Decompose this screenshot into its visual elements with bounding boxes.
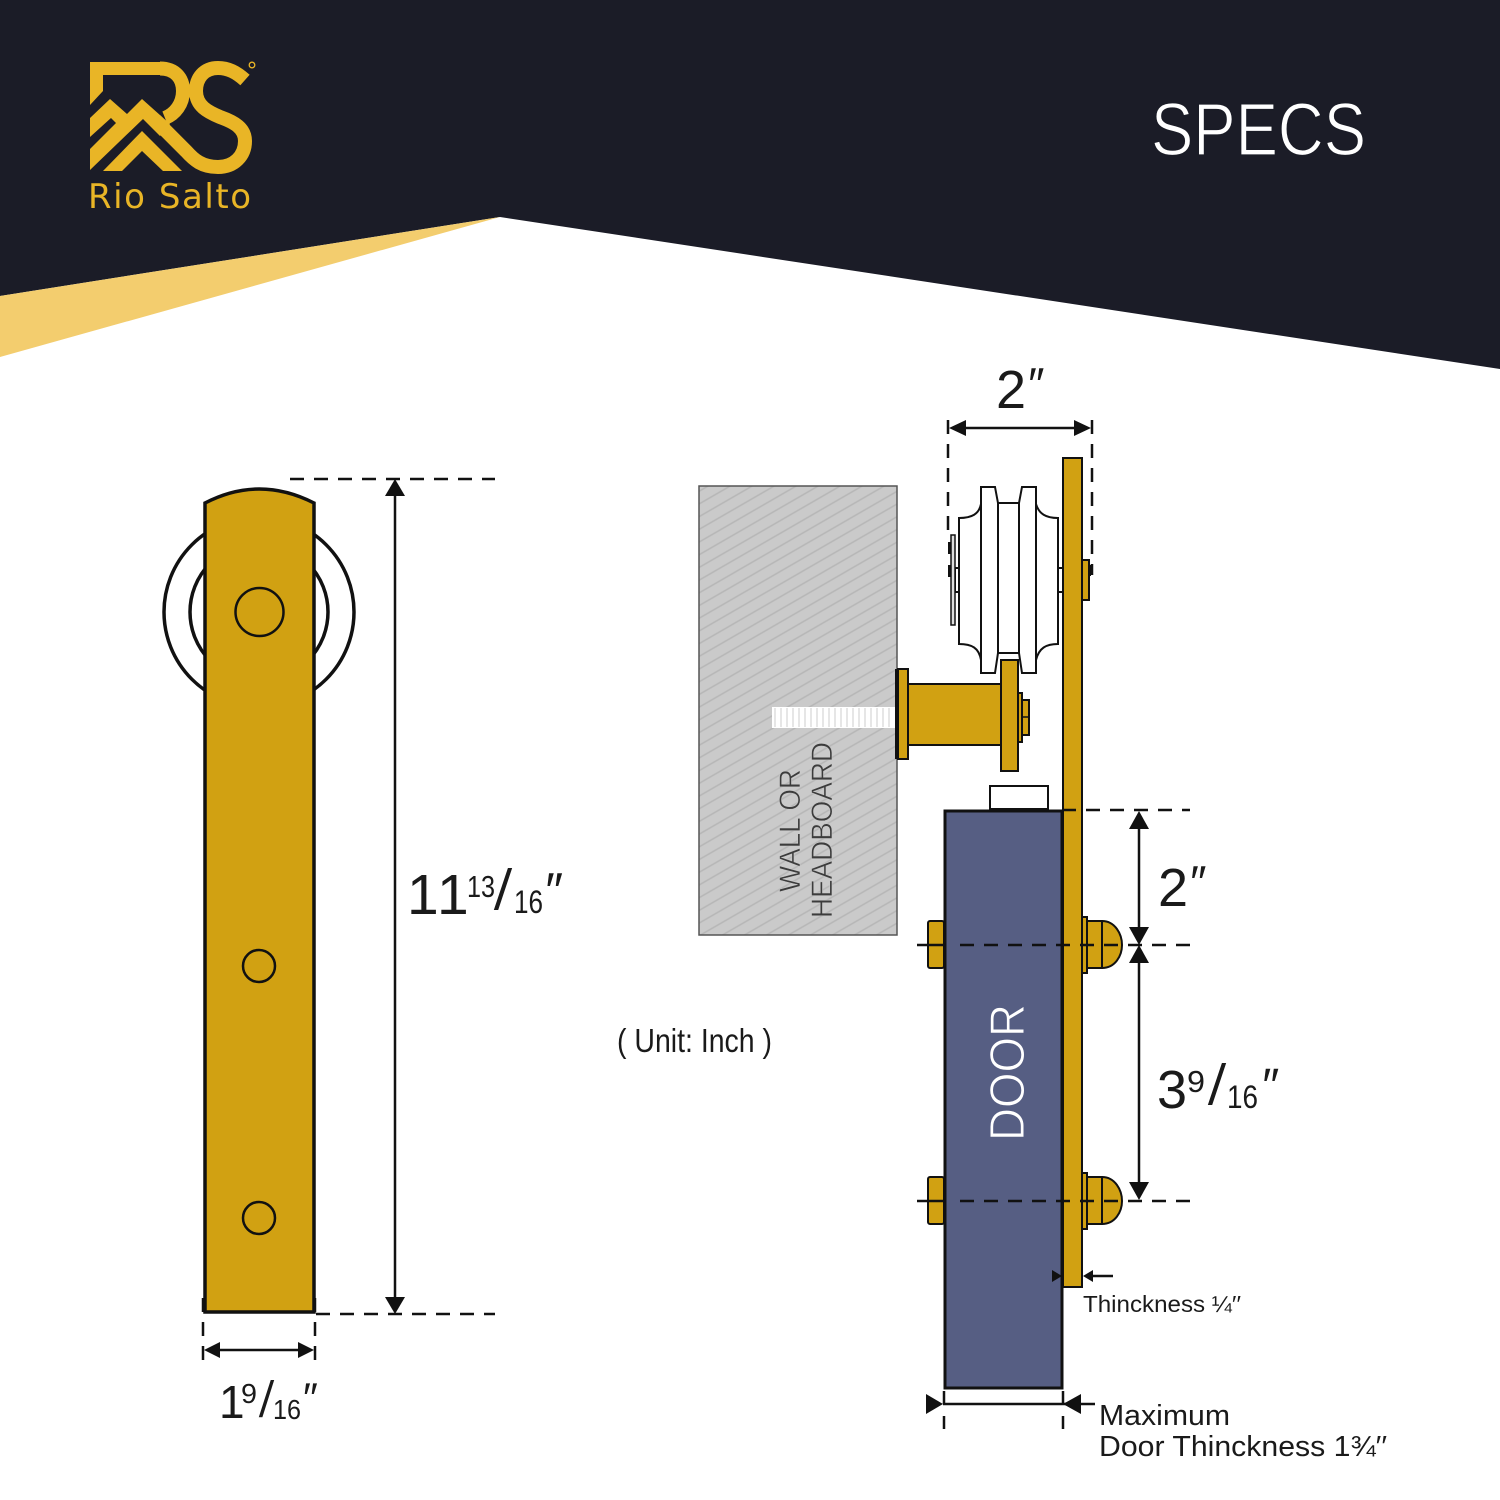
- width dimension: [203, 1298, 315, 1360]
- upper door bolt: [928, 917, 1122, 973]
- wall block: [699, 486, 897, 935]
- wall label: WALL OR: [774, 769, 807, 892]
- logo mountain inner chevron: [103, 131, 182, 171]
- lower door bolt: [928, 1173, 1122, 1229]
- height label: [407, 858, 563, 927]
- two inch label: 2: [1158, 858, 1188, 918]
- three and nine sixteenths label: [1157, 1053, 1279, 1120]
- two inch label: ″: [1188, 856, 1206, 908]
- width label: ″: [301, 1374, 318, 1421]
- standoff spacer: [895, 660, 1029, 771]
- header dark band: [0, 0, 1500, 369]
- width label: [219, 1371, 318, 1429]
- door thickness label: Door Thinckness 1¾′′: [1099, 1431, 1387, 1463]
- height label: ″: [543, 863, 563, 919]
- three and nine sixteenths label: 3: [1157, 1060, 1187, 1120]
- three and nine sixteenths dimension: [1129, 945, 1149, 1200]
- screw thread: [772, 707, 897, 728]
- title: SPECS: [1151, 88, 1366, 171]
- strap thickness label: Thinckness ¼′′: [1083, 1291, 1241, 1317]
- two inch dimension: [1129, 811, 1149, 945]
- strap: [205, 489, 314, 1312]
- strap top nut: [1082, 560, 1091, 600]
- unit note: ( Unit: Inch ): [617, 1022, 772, 1059]
- logo: Rio Salto: [88, 62, 255, 217]
- strap thickness arrows: [1052, 1270, 1113, 1282]
- height label: 16: [514, 884, 543, 920]
- logo mountain zigzag band with slit: [90, 99, 170, 170]
- width label: 1: [219, 1376, 245, 1428]
- logo mark S and R leg: [155, 68, 245, 167]
- roller wheel behind strap: [162, 532, 356, 691]
- roller width label: ″: [1026, 358, 1044, 410]
- height label: 11: [407, 863, 469, 927]
- headboard label: HEADBOARD: [806, 742, 839, 918]
- lower bolt hole: [243, 1202, 275, 1234]
- width label: /: [258, 1371, 276, 1429]
- door thickness label: [1099, 1400, 1387, 1463]
- logo wordmark: Rio Salto: [88, 177, 251, 217]
- height dimension: [290, 479, 495, 1314]
- panel: front view of hanger: [164, 479, 563, 1429]
- roller width label: 2: [996, 360, 1026, 420]
- height label: /: [493, 858, 514, 923]
- middle bolt hole: [243, 950, 275, 982]
- three and nine sixteenths label: 9: [1187, 1064, 1205, 1099]
- door thickness label: Maximum: [1099, 1400, 1230, 1432]
- roller: [948, 487, 1063, 673]
- three and nine sixteenths label: ″: [1260, 1060, 1279, 1113]
- bolt centre dashes: [917, 810, 1190, 1201]
- yellow accent wedge: [0, 217, 500, 357]
- height label: 13: [467, 869, 495, 904]
- logo mark R left bar: [90, 62, 162, 105]
- door label: DOOR: [981, 1004, 1035, 1141]
- top bolt: [236, 588, 284, 636]
- strap side: [1063, 458, 1082, 1287]
- panel: side view: [699, 358, 1387, 1463]
- door thickness dimension: [926, 1391, 1095, 1429]
- width label: 16: [273, 1394, 301, 1425]
- width label: 9: [241, 1378, 257, 1409]
- logo mark R bowl: [160, 68, 183, 118]
- door stop block: [990, 786, 1048, 811]
- logo registered mark: [249, 62, 255, 68]
- three and nine sixteenths label: /: [1207, 1053, 1228, 1118]
- roller width dimension: [948, 420, 1092, 575]
- three and nine sixteenths label: 16: [1227, 1079, 1258, 1115]
- door: [945, 811, 1062, 1388]
